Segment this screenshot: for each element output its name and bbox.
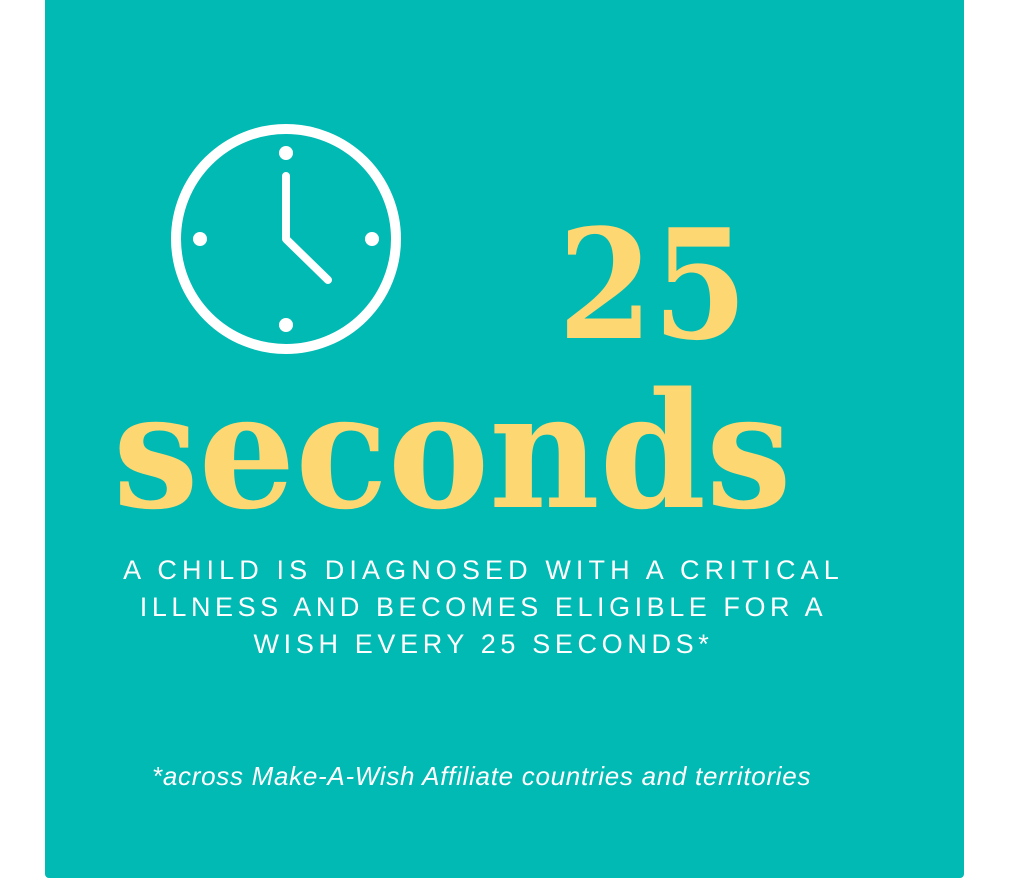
footnote: *across Make-A-Wish Affiliate countries and territories <box>152 761 811 791</box>
text block: description: WISH EVERY 25 SECONDS* <box>254 629 713 659</box>
text block: description: ILLNESS AND BECOMES ELIGIBLE FOR A <box>140 592 827 622</box>
number: 25: 25 <box>558 195 748 374</box>
text block: description <box>123 555 844 659</box>
icon: clock <box>171 124 401 354</box>
text block: description: A CHILD IS DIAGNOSED WITH A CRITICAL <box>123 555 844 585</box>
heading: seconds: seconds <box>113 357 792 545</box>
